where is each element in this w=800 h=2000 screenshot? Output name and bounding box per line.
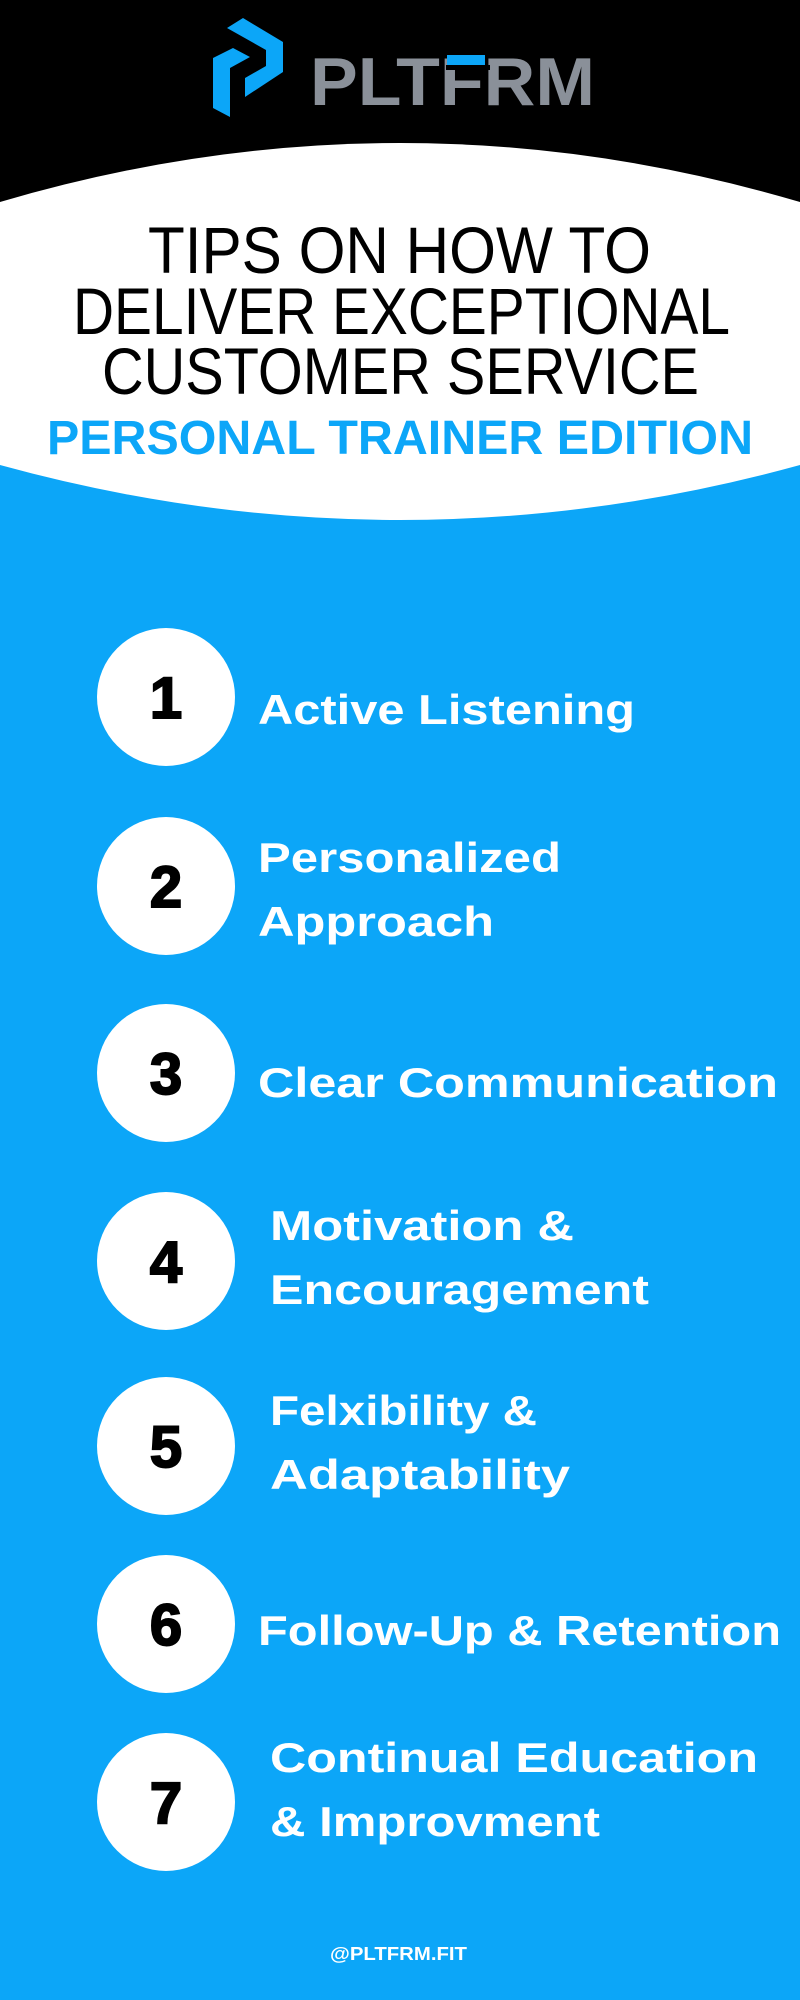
tip 7 xyxy=(97,1733,758,1871)
tip 6: Follow-Up & Retention xyxy=(258,1607,781,1654)
title xyxy=(73,213,730,408)
tip 7: Continual Education xyxy=(270,1734,758,1781)
tip 1: 1 xyxy=(150,666,182,731)
tip 2: Personalized xyxy=(258,834,561,881)
subtitle: PERSONAL TRAINER EDITION xyxy=(47,412,753,465)
tip 6: 6 xyxy=(150,1593,182,1658)
tip 5: Felxibility & xyxy=(270,1387,537,1434)
tip 1: Active Listening xyxy=(258,686,635,733)
tip 7: & Improvment xyxy=(270,1798,600,1845)
tip 1 xyxy=(97,628,635,766)
logo xyxy=(213,18,595,120)
tip 4: 4 xyxy=(150,1230,182,1295)
tip 4: Motivation & xyxy=(270,1202,574,1249)
title: TIPS ON HOW TO xyxy=(148,213,651,287)
tip 3: Clear Communication xyxy=(258,1059,778,1106)
tip 4: Encouragement xyxy=(270,1266,649,1313)
logo wordmark: PLTFRM xyxy=(310,44,595,120)
tip 5: Adaptability xyxy=(270,1451,571,1498)
footer handle: @PLTFRM.FIT xyxy=(330,1944,467,1964)
header white panel xyxy=(0,143,800,520)
tip 2: Approach xyxy=(258,898,494,945)
icon: logo mark xyxy=(213,18,283,117)
title: CUSTOMER SERVICE xyxy=(102,334,699,408)
tip 4 xyxy=(97,1192,649,1330)
tip 2 xyxy=(97,817,561,955)
tip 5: 5 xyxy=(150,1415,182,1480)
tip 3 xyxy=(97,1004,778,1142)
tip 2: 2 xyxy=(150,855,182,920)
tip 6 xyxy=(97,1555,781,1693)
tip 7: 7 xyxy=(150,1771,182,1836)
tip 3: 3 xyxy=(150,1042,182,1107)
tip 5 xyxy=(97,1377,571,1515)
